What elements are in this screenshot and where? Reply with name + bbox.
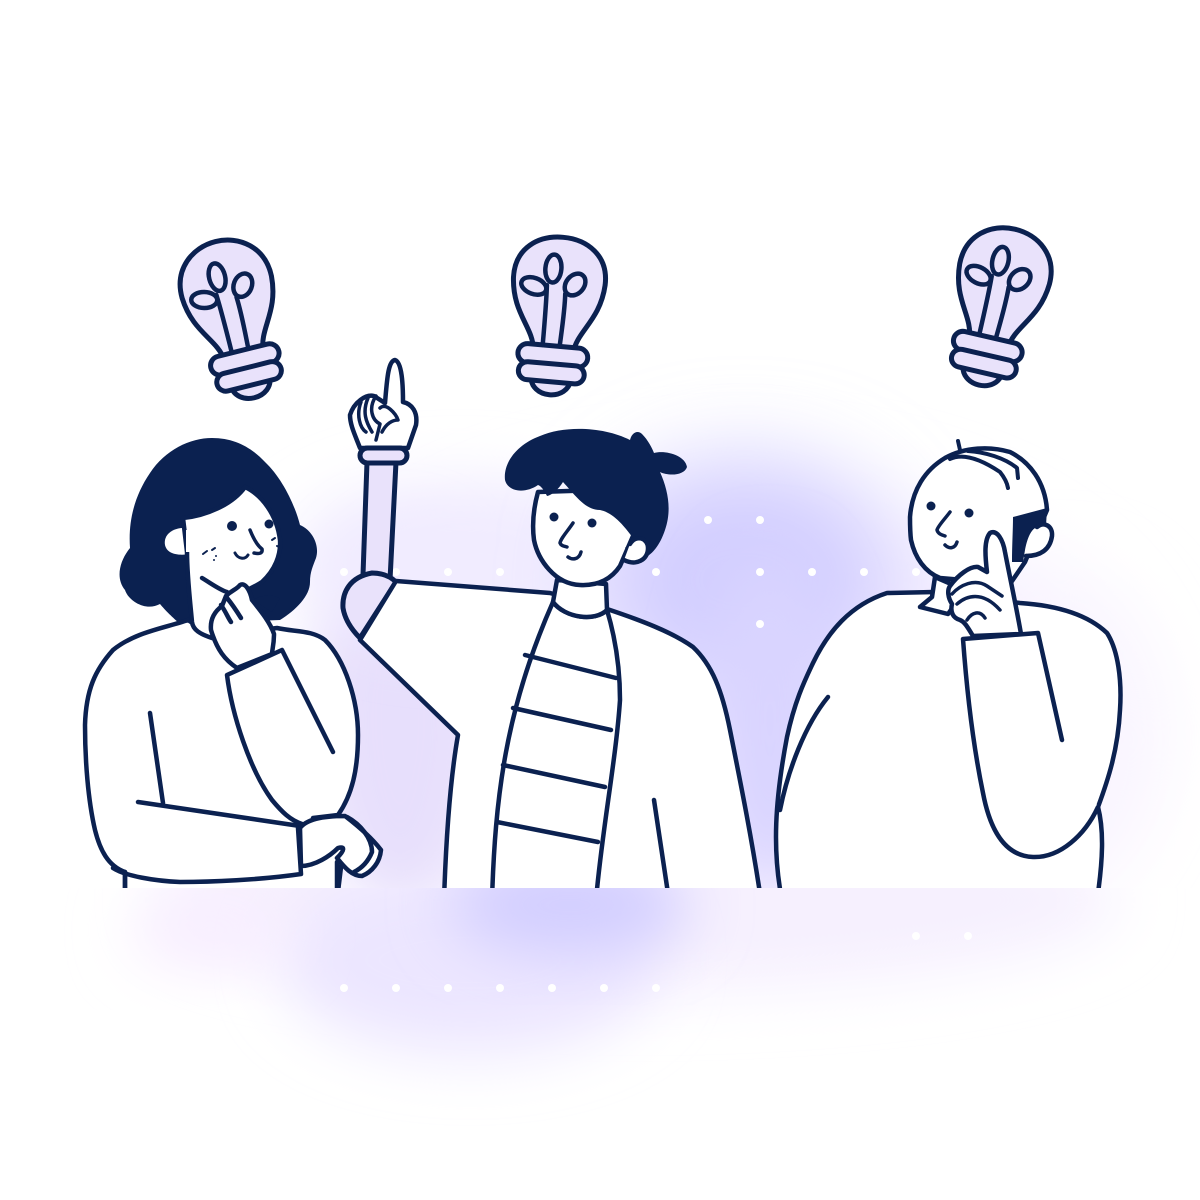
figure: man with finger to face (776, 441, 1120, 900)
jacket (360, 581, 761, 900)
woman freckles (203, 538, 279, 560)
woman lower hand (300, 816, 381, 876)
right man ear (1026, 526, 1042, 554)
right man sleeve (963, 633, 1098, 857)
woman upper sleeve (227, 650, 333, 824)
right man body (776, 592, 1120, 900)
striped shirt (492, 602, 620, 900)
right man hand (948, 532, 1021, 636)
right man hair patch (1012, 508, 1047, 562)
figure: woman (85, 438, 381, 900)
shoulder (343, 573, 396, 638)
man eyes (550, 512, 596, 528)
white dot grid (340, 516, 972, 992)
man ear (624, 538, 648, 562)
figure: man pointing up (343, 360, 761, 900)
right man head (910, 448, 1047, 584)
background glow: upper (294, 421, 1138, 888)
right man nose and smile (937, 512, 957, 548)
woman forearm (138, 802, 300, 826)
pointing hand (350, 360, 416, 448)
man face (533, 490, 640, 585)
shirt stripes (497, 655, 616, 842)
man nose and smile (560, 523, 581, 559)
right man eyes (926, 502, 974, 518)
woman raised hand (211, 584, 274, 668)
raised arm (363, 462, 396, 580)
woman hair (120, 438, 317, 624)
woman face and neck (183, 487, 280, 638)
woman body (85, 620, 358, 900)
woman eyes (227, 520, 274, 531)
right man neck (918, 576, 951, 616)
woman nose, smile and chin (202, 530, 262, 592)
right man back fold (780, 697, 828, 810)
illustration (82, 225, 1138, 1066)
cuff (360, 448, 407, 463)
background glow: lower (142, 888, 1095, 1066)
man hair (505, 429, 687, 560)
icon: light bulb right (934, 219, 1060, 395)
icon: light bulb left (171, 230, 299, 409)
jacket fold (654, 800, 669, 900)
woman hair over collar (253, 596, 280, 612)
neck (553, 580, 607, 617)
icon: light bulb centre (504, 233, 609, 399)
right man hair strands (950, 441, 1018, 488)
woman ear (164, 528, 185, 555)
